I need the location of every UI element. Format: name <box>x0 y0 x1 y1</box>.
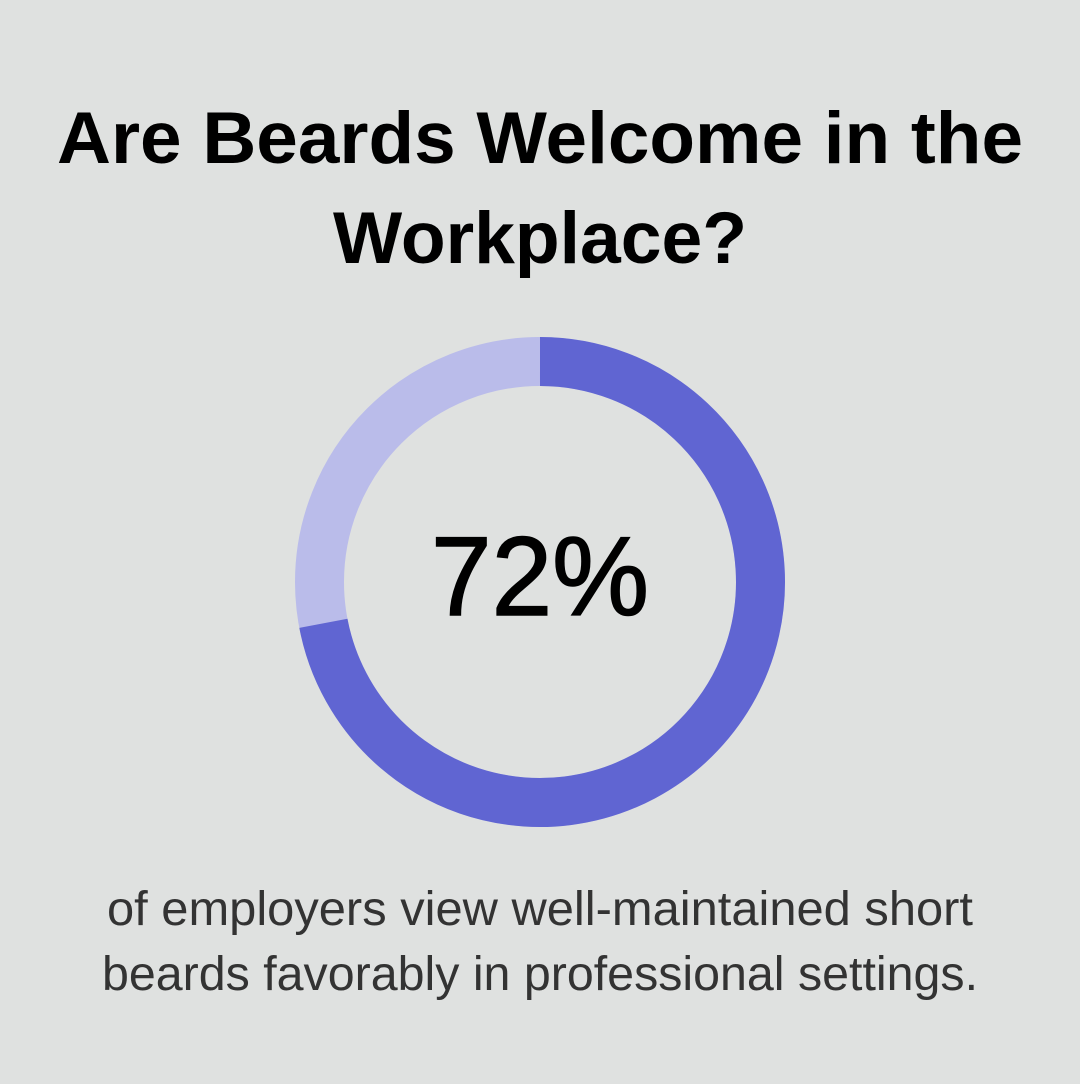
title: Are Beards Welcome in the <box>57 98 1023 179</box>
central value: 72% <box>431 514 649 639</box>
title <box>57 98 1023 279</box>
description: beards favorably in professional settings. <box>102 948 978 1001</box>
donut chart: 72% <box>320 362 760 802</box>
title: Workplace? <box>333 198 747 279</box>
description <box>102 883 978 1001</box>
description: of employers view well-maintained short <box>107 883 973 936</box>
